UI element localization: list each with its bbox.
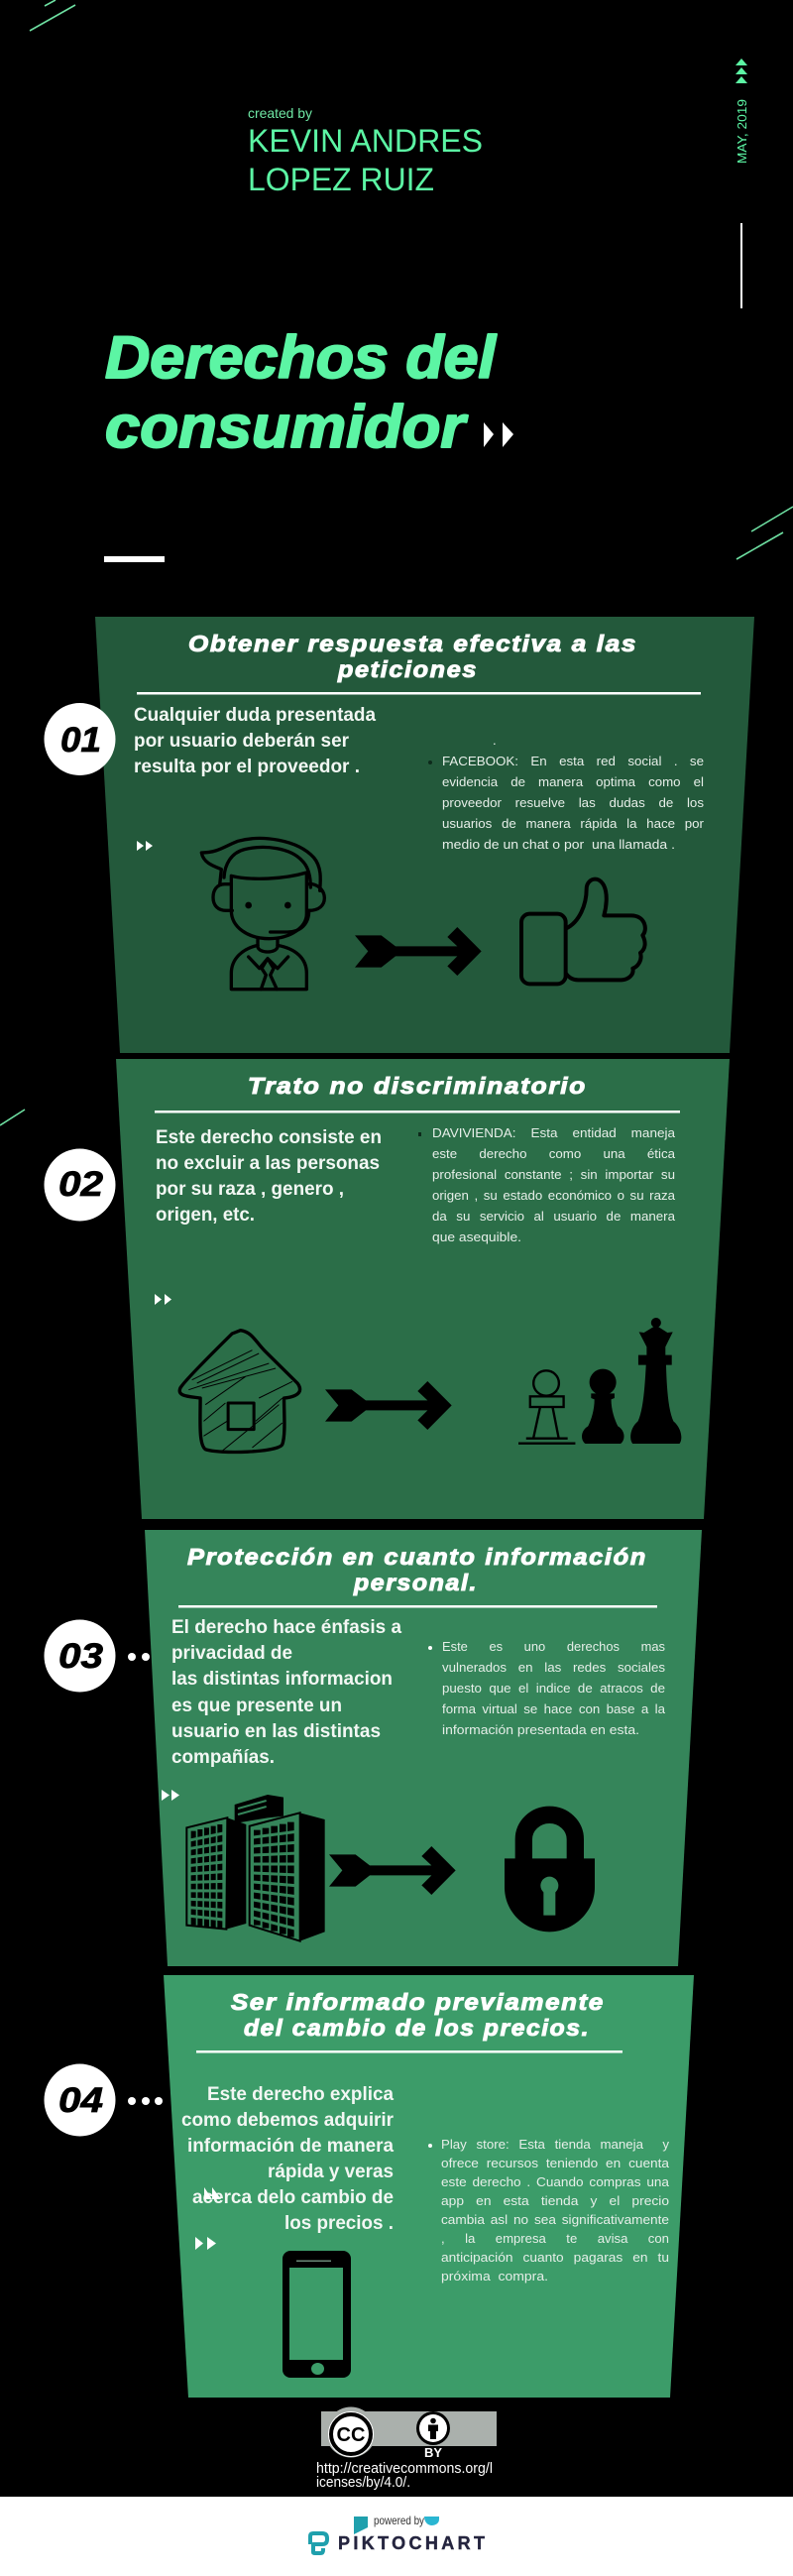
text block: main statement: rápida y veras: [268, 2162, 394, 2182]
outline pawn: [518, 1370, 575, 1444]
text block: example: que asequible.: [432, 1229, 521, 1244]
connector dots 04: [128, 2097, 163, 2105]
heading: del cambio de los precios.: [244, 2015, 590, 2041]
license: creative commons: [316, 2407, 497, 2491]
number badge 02: [44, 1148, 115, 1222]
heading: Trato no discriminatorio: [248, 1073, 587, 1099]
icon: chess pieces: [518, 1318, 681, 1444]
text block: main statement: origen, etc.: [156, 1205, 255, 1226]
title: Derechos del: [105, 324, 497, 391]
number badge 03: 03: [58, 1637, 104, 1676]
text block: main statement: información de manera: [187, 2136, 394, 2157]
number badge 04: [44, 2064, 115, 2136]
text block: example: [428, 2137, 670, 2283]
panel: right 4: [164, 1975, 694, 2398]
text block: example: cambia asl no sea significativamente: [441, 2212, 669, 2227]
powered by label: powered by: [374, 2514, 424, 2527]
number badge 01: 01: [60, 721, 101, 760]
text block: example: [428, 733, 705, 852]
number badge 04: 04: [58, 2081, 103, 2120]
heading: personal.: [353, 1570, 478, 1595]
wordmark: PIKTOCHART: [338, 2533, 485, 2553]
text block: main statement: [134, 705, 376, 777]
text block: example: FACEBOOK: En esta red social . se: [442, 754, 704, 768]
icon: cc: [325, 2407, 377, 2457]
text block: main statement: como debemos adquirir: [181, 2110, 395, 2131]
author name: KEVIN ANDRES: [248, 123, 483, 159]
accent bar: [104, 556, 165, 562]
footer: piktochart: [0, 2497, 793, 2576]
heading: [231, 1989, 605, 2041]
number badge 03: [44, 1620, 115, 1692]
decorative slashes: [0, 0, 793, 1125]
text block: example: da su servicio al usuario de manera: [432, 1209, 676, 1224]
title: consumidor: [105, 394, 469, 460]
header: author block: [248, 105, 483, 197]
text block: main statement: no excluir a las personas: [156, 1153, 380, 1174]
text block: main statement: las distintas informacion: [171, 1669, 393, 1690]
text block: example: Este es uno derechos mas: [442, 1639, 665, 1654]
text block: example: forma virtual se hace con base a la: [442, 1701, 666, 1716]
text block: example: este derecho . Cuando compras una: [441, 2174, 670, 2189]
text block: example: evidencia de manera optima como el: [442, 774, 704, 789]
arrow: [355, 927, 482, 976]
heading: peticiones: [337, 656, 478, 682]
text block: example: DAVIVIENDA: Esta entidad maneja: [432, 1125, 676, 1140]
text block: example: próxima compra.: [441, 2269, 548, 2283]
text block: example: vulnerados en las redes sociales: [442, 1660, 665, 1675]
text block: example: profesional constante ; sin importar su: [432, 1167, 675, 1182]
heading: [187, 1544, 647, 1595]
date: MAY, 2019: [735, 99, 749, 164]
text block: example: puesto que el indice de atracos de: [442, 1681, 665, 1696]
text block: example: Play store: Esta tienda maneja y: [441, 2137, 669, 2152]
text block: example: ofrece recursos teniendo en cuenta: [441, 2156, 670, 2170]
text block: example: proveedor resuelve las dudas de los: [442, 795, 704, 810]
text block: main statement: [171, 1617, 401, 1768]
heading: Ser informado previamente: [231, 1989, 605, 2015]
arrow: [329, 1846, 456, 1895]
text block: example: , la empresa te avisa con: [441, 2231, 669, 2246]
icon: call center agent: [201, 839, 324, 990]
icon: by person: [416, 2411, 450, 2445]
text block: example: información presentada en esta.: [442, 1722, 639, 1737]
panel: right 1: [95, 617, 754, 1053]
icon: up triangles: [736, 59, 747, 83]
icon: double triangle: [155, 1294, 171, 1305]
by label: BY: [424, 2445, 442, 2460]
icon: padlock: [505, 1815, 595, 1932]
text block: main statement: Cualquier duda presentada: [134, 705, 376, 726]
icon: double triangle: [195, 2237, 216, 2250]
icon: double triangle overlapping text: [204, 2187, 221, 2199]
license url: http://creativecommons.org/l: [316, 2460, 493, 2477]
text block: example: app en esta tienda y el precio: [441, 2193, 669, 2208]
text block: main statement: privacidad de: [171, 1643, 292, 1664]
icon: smartphone: [283, 2251, 351, 2378]
text block: example: anticipación cuanto pagaras en tu: [441, 2250, 669, 2265]
number badge 01: [44, 703, 115, 775]
created by label: created by: [248, 105, 312, 121]
black queen: [630, 1318, 681, 1444]
text block: example: [428, 1639, 666, 1737]
author name: [248, 123, 483, 197]
text block: main statement: por su raza , genero ,: [156, 1179, 344, 1200]
license url: icenses/by/4.0/.: [316, 2474, 410, 2491]
heading: Obtener respuesta efectiva a las: [188, 631, 637, 656]
arrow: [325, 1381, 452, 1430]
panel: right 3: [145, 1530, 702, 1966]
author name: LOPEZ RUIZ: [248, 162, 434, 197]
text block: main statement: usuario en las distintas: [171, 1721, 381, 1742]
icon: cc: CC: [337, 2424, 365, 2446]
text block: main statement: Este derecho explica: [207, 2084, 394, 2105]
number badge 02: 02: [58, 1165, 104, 1204]
text block: main statement: [181, 2084, 395, 2234]
icon: double triangle: [484, 422, 513, 447]
icon: thumbs up: [521, 879, 645, 984]
text block: main statement: resulta por el proveedor .: [134, 757, 360, 777]
text block: example: origen , su estado económico o su raza: [432, 1188, 676, 1203]
icon: double triangle: [137, 841, 153, 851]
connector dots 03: [128, 1653, 150, 1661]
text block: main statement: es que presente un: [171, 1696, 342, 1716]
text block: example: usuarios de manera rápida la hace por: [442, 816, 705, 831]
panel: right 2: [116, 1059, 730, 1519]
text block: main statement: por usuario deberán ser: [134, 731, 350, 752]
icon: double triangle: [162, 1790, 179, 1801]
text block: main statement: acerca delo cambio de: [192, 2187, 394, 2208]
text block: example: este derecho como una ética: [432, 1146, 676, 1161]
icon: sketched house: [179, 1331, 300, 1452]
text block: main statement: [156, 1127, 382, 1226]
text block: main statement: Este derecho consiste en: [156, 1127, 382, 1148]
text block: example: .: [493, 733, 497, 748]
text block: main statement: los precios .: [284, 2213, 394, 2234]
text block: example: [418, 1125, 676, 1244]
icon: office buildings: [186, 1795, 325, 1941]
text block: main statement: compañías.: [171, 1747, 275, 1768]
heading: [188, 631, 637, 682]
text block: main statement: El derecho hace énfasis a: [171, 1617, 401, 1638]
icon: flag: [354, 2517, 368, 2534]
black pawn: [582, 1369, 624, 1444]
icon: blue tab: [424, 2517, 439, 2525]
text block: example: medio de un chat o por una llamada .: [442, 837, 675, 852]
date column with triangles: [735, 59, 749, 164]
title: [105, 324, 497, 460]
icon: piktochart logo: [310, 2533, 327, 2553]
heading: Protección en cuanto información: [187, 1544, 647, 1570]
license url: [316, 2460, 493, 2491]
